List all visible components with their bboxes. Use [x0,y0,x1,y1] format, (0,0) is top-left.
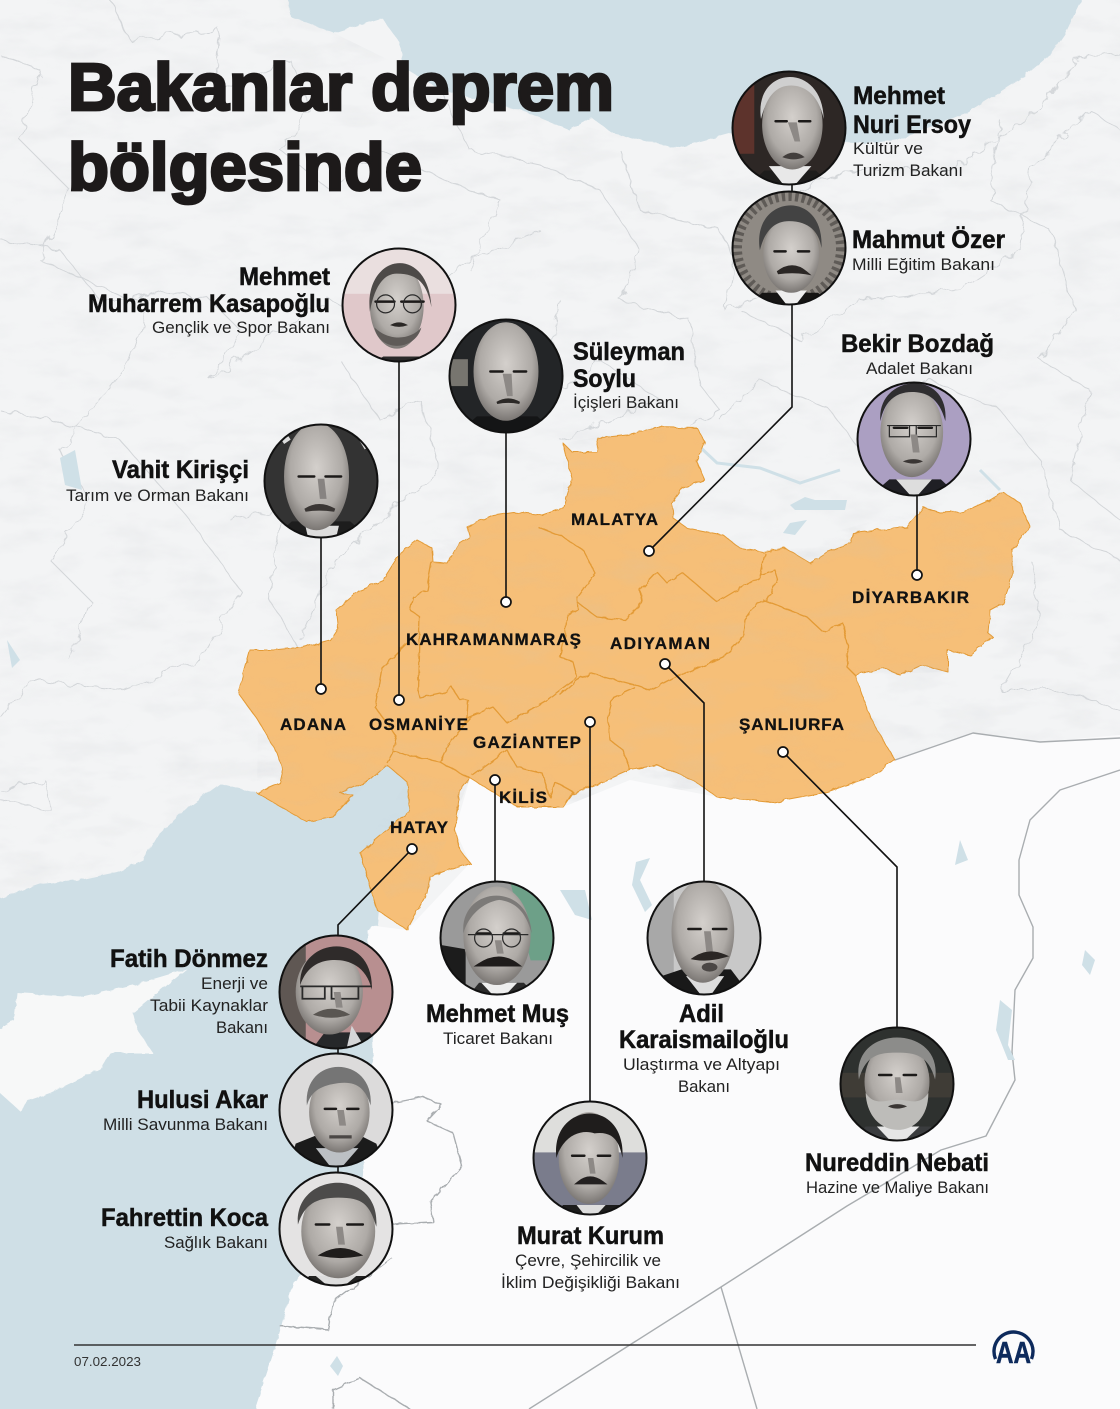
minister: Mehmet Nuri Ersoy: Turizm Bakanı [853,161,963,180]
minister: Fatih Dönmez: Enerji ve [201,974,268,993]
minister: Adil Karaismailoğlu [619,874,789,1096]
minister: Mehmet Nuri Ersoy: Nuri Ersoy [853,111,971,139]
minister: Adil Karaismailoğlu: Adil [679,1000,724,1028]
minister: Mehmet Nuri Ersoy: Mehmet [853,82,946,110]
minister: Murat Kurum [501,1094,680,1292]
icon: agency logo: AA [996,1335,1031,1370]
province labels [280,510,969,837]
minister: Fatih Dönmez: Tabii Kaynaklar [150,996,268,1015]
title: Bakanlar deprem [68,50,614,125]
minister: Murat Kurum: İklim Değişikliği Bakanı [501,1273,680,1292]
province labels: MALATYA [571,510,658,529]
province labels: HATAY [390,818,449,837]
province labels: GAZİANTEP [473,733,581,752]
minister: Mehmet Muş: Mehmet Muş [426,1000,569,1028]
province labels: DİYARBAKIR [852,588,969,607]
minister: Nureddin Nebati [805,1020,989,1197]
province labels: KAHRAMANMARAŞ [406,630,581,649]
minister: Adil Karaismailoğlu: Karaismailoğlu [619,1026,789,1054]
minister: Mehmet Nuri Ersoy [732,70,972,186]
minister: Fatih Dönmez [111,934,394,1050]
minister: Mehmet Muharrem Kasapoğlu: Gençlik ve Spor Bakanı [152,318,330,337]
minister: Vahit Kirişçi: Tarım ve Orman Bakanı [66,486,249,505]
connector lines from ministers to provinces [321,185,917,1172]
minister: Fahrettin Koca [102,1172,394,1286]
minister: Mahmut Özer: Milli Eğitim Bakanı [852,255,995,274]
minister: Murat Kurum: Murat Kurum [517,1222,664,1250]
minister: Mehmet Muharrem Kasapoğlu: Mehmet [239,263,331,291]
minister: Vahit Kirişçi: Vahit Kirişçi [112,456,249,484]
minister: Hulusi Akar: Hulusi Akar [137,1086,268,1114]
title: bölgesinde [68,130,422,205]
title [68,50,614,205]
minister: Bekir Bozdağ: Bekir Bozdağ [841,330,994,358]
minister: Adil Karaismailoğlu: Ulaştırma ve Altyapı [623,1055,780,1074]
province labels: OSMANİYE [369,715,468,734]
minister: Fahrettin Koca: Sağlık Bakanı [164,1233,268,1252]
province labels: ŞANLIURFA [739,715,844,734]
province labels: KİLİS [499,788,547,807]
minister: Adil Karaismailoğlu: Bakanı [678,1077,730,1096]
minister: Mehmet Muharrem Kasapoğlu: Muharrem Kasapoğlu [88,290,330,318]
minister: Nureddin Nebati: Nureddin Nebati [805,1149,989,1177]
minister: Süleyman Soylu: Süleyman [573,338,685,366]
minister: Süleyman Soylu: Soylu [573,365,636,393]
minister: Mehmet Muharrem Kasapoğlu [89,248,456,362]
minister: Mehmet Muş [426,874,569,1048]
minister: Bekir Bozdağ [841,330,994,503]
province labels: ADANA [280,715,346,734]
province labels: ADIYAMAN [610,634,710,653]
minister: Nureddin Nebati: Hazine ve Maliye Bakanı [806,1178,989,1197]
minister: Bekir Bozdağ: Adalet Bakanı [866,359,973,378]
minister: Fahrettin Koca: Fahrettin Koca [101,1204,269,1232]
minister: Vahit Kirişçi [66,424,378,538]
minister: Fatih Dönmez: Fatih Dönmez [110,945,268,973]
minister: Mehmet Muş: Ticaret Bakanı [443,1029,553,1048]
footer rule and date: 07.02.2023 [74,1355,141,1369]
minister: Mahmut Özer [732,190,1005,306]
minister: Süleyman Soylu: İçişleri Bakanı [573,393,679,412]
map: affected provinces in orange [238,426,1030,930]
minister: Hulusi Akar [104,1052,394,1168]
minister: Hulusi Akar: Milli Savunma Bakanı [103,1115,268,1134]
minister: Mehmet Nuri Ersoy: Kültür ve [853,139,923,158]
minister: Murat Kurum: Çevre, Şehircilik ve [515,1251,661,1270]
minister: Mahmut Özer: Mahmut Özer [852,225,1005,254]
minister: Süleyman Soylu [448,318,684,434]
minister: Fatih Dönmez: Bakanı [216,1018,268,1037]
location dots on provinces [316,546,922,854]
